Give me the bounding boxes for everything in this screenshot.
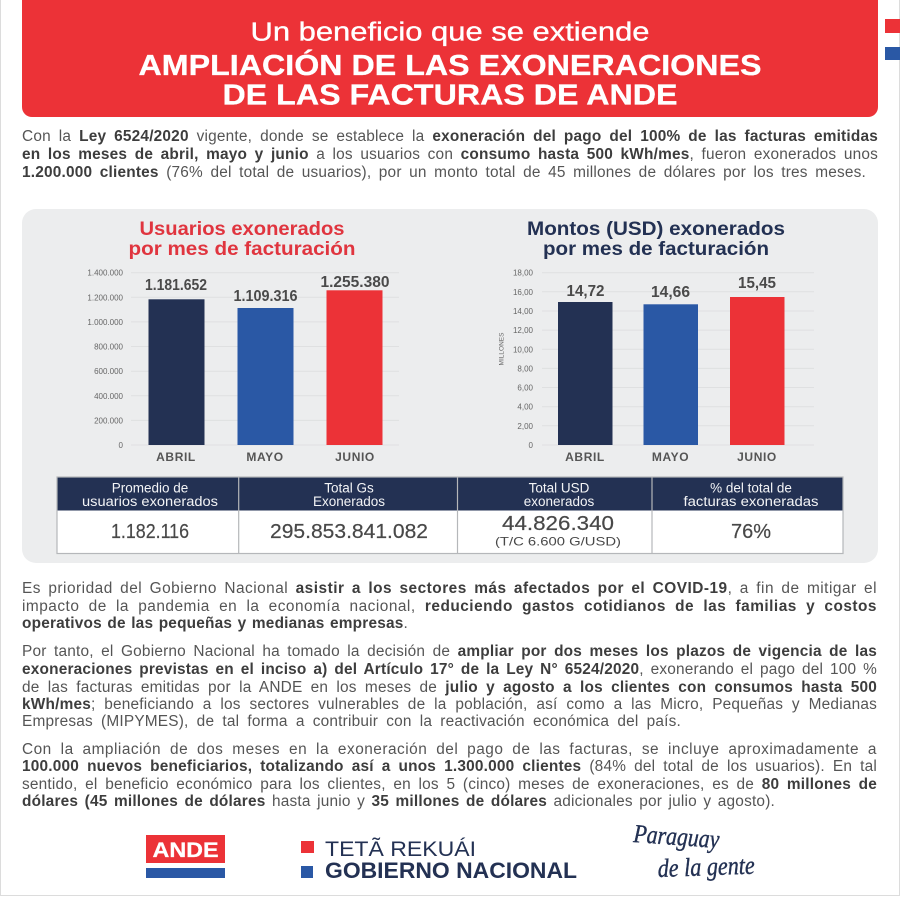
paragraph: prioridad: Es prioridad del Gobierno Nacional asistir a los sectores más afectados por el COVID-19, a fin de mitigar el (22, 580, 877, 597)
chart: montos USD exonerados (498, 219, 814, 464)
logo: Paraguay de la gente: Paraguay (632, 820, 721, 854)
chart: usuarios exonerados: 400.000 (94, 392, 124, 401)
chart: montos USD exonerados: ABRIL (565, 450, 605, 464)
paragraph: prioridad: impacto de la pandemia en la economía nacional, reduciendo gastos cotidianos de las familias y costos (22, 598, 877, 615)
chart: usuarios exonerados: 1.200.000 (87, 293, 124, 302)
header title: Un beneficio que se extiende (250, 18, 650, 46)
summary table: (T/C 6.600 G/USD) (495, 534, 621, 548)
chart: montos USD exonerados: 18,00 (513, 269, 534, 278)
header banner (22, 0, 878, 117)
paragraph: ampliación: exoneraciones previstas en el inciso a) del Artículo 17° de la Ley N° 6524/2020, exonerando el pago del 100 % (22, 661, 877, 678)
header title (138, 18, 762, 112)
header title: AMPLIACIÓN DE LAS EXONERACIONES (138, 48, 762, 82)
paragraph: beneficiarios: 100.000 nuevos beneficiarios, totalizando así a unos 1.300.000 clientes (84% del total de los usuarios). En tal (22, 758, 877, 775)
intro paragraph: 1.200.000 clientes (76% del total de usuarios), por un monto total de 45 millones de dólares por los tres meses. (22, 164, 866, 181)
intro paragraph: Con la Ley 6524/2020 vigente, donde se establece la exoneración del pago del 100% de las facturas emitidas (22, 128, 878, 145)
paragraph: beneficiarios: Con la ampliación de dos meses en la exoneración del pago de las facturas, se incluye aproximadamente a (22, 741, 877, 758)
chart: montos USD exonerados: MILLONES (498, 332, 506, 365)
chart: montos USD exonerados: 10,00 (513, 345, 534, 354)
chart: montos USD exonerados: por mes de facturación (543, 239, 769, 260)
chart: usuarios exonerados: 1.255.380 (320, 274, 390, 291)
paragraph: beneficiarios: dólares (45 millones de dólares hasta junio y 35 millones de dólares adicionales por julio y agosto). (22, 793, 775, 810)
summary table: % del total de (710, 480, 792, 496)
summary table: Promedio de (112, 480, 188, 496)
paragraph: ampliación: Por tanto, el Gobierno Nacional ha tomado la decisión de ampliar por dos meses los plazos de vigencia de las (22, 643, 877, 660)
chart: usuarios exonerados: 1.000.000 (87, 318, 124, 327)
chart: usuarios exonerados: por mes de facturación (128, 239, 356, 260)
summary table: exonerados (524, 494, 595, 509)
paragraph: prioridad: operativos de las pequeñas y medianas empresas. (22, 615, 408, 632)
chart: usuarios exonerados: ABRIL (156, 450, 196, 464)
summary table: Exonerados (313, 494, 385, 509)
logo: Tetã Rekuái Gobierno Nacional (301, 837, 577, 882)
logo: Paraguay de la gente (632, 820, 755, 883)
summary table: Total Gs (324, 480, 374, 496)
chart: usuarios exonerados: Usuarios exonerados (140, 219, 344, 240)
chart: montos USD exonerados: 14,00 (513, 307, 534, 316)
summary table: 76% (731, 521, 771, 543)
flag mark (885, 19, 900, 60)
chart: usuarios exonerados: MAYO (246, 450, 284, 464)
chart: usuarios exonerados: 1.109.316 (234, 288, 298, 305)
summary table: 44.826.340 (502, 513, 614, 535)
charts panel (22, 209, 878, 563)
paragraph: ampliación: de las facturas emitidas por la ANDE en los meses de julio y agosto a los clientes con consumos hasta 500 (22, 679, 877, 696)
summary table (56, 476, 844, 554)
chart: montos USD exonerados: 2,00 (517, 422, 534, 431)
chart: montos USD exonerados: JUNIO (737, 450, 777, 464)
chart: usuarios exonerados: JUNIO (335, 450, 375, 464)
paragraph: ampliación: kWh/mes; beneficiando a los sectores vulnerables de la población, así como a las Micro, Pequeñas y Medianas (22, 696, 877, 713)
chart: montos USD exonerados: 14,66 (651, 284, 690, 301)
chart: montos USD exonerados: 15,45 (738, 275, 776, 292)
chart: usuarios exonerados: 1.181.652 (145, 277, 207, 294)
chart: montos USD exonerados: 16,00 (513, 288, 534, 297)
summary table: 1.182.116 (111, 521, 189, 543)
chart: usuarios exonerados: 600.000 (94, 367, 124, 376)
chart: usuarios exonerados: 0 (119, 441, 124, 450)
chart: usuarios exonerados: 800.000 (94, 342, 124, 352)
chart: montos USD exonerados: 0 (529, 441, 534, 450)
paragraph: prioridad (22, 580, 877, 632)
chart: usuarios exonerados (87, 219, 399, 464)
logo: Tetã Rekuái Gobierno Nacional: TETÃ REKUÁI (325, 837, 476, 861)
chart: montos USD exonerados: 4,00 (517, 403, 534, 412)
chart: montos USD exonerados: 8,00 (517, 364, 534, 373)
chart: montos USD exonerados: 14,72 (566, 283, 604, 300)
chart: usuarios exonerados: 200.000 (94, 416, 124, 425)
summary table: Total USD (529, 480, 590, 496)
paragraph: beneficiarios: sentido, el beneficio económico para los clientes, en los 5 (cinco) meses de exoneraciones, es de 80 millones de (22, 776, 877, 793)
intro paragraph (22, 128, 878, 181)
paragraph: ampliación: Empresas (MIPYMES), de tal forma a contribuir con la reactivación económica del país. (22, 713, 681, 730)
summary table: usuarios exonerados (82, 494, 218, 509)
logo: ANDE (146, 835, 225, 878)
chart: usuarios exonerados: 1.400.000 (87, 269, 124, 278)
summary table: facturas exoneradas (684, 494, 819, 509)
chart: montos USD exonerados: MAYO (652, 450, 689, 464)
summary table: 295.853.841.082 (270, 521, 428, 543)
intro paragraph: en los meses de abril, mayo y junio a los usuarios con consumo hasta 500 kWh/mes, fueron exonerados unos (22, 146, 878, 163)
logo wordmark: ANDE: ANDE (152, 838, 218, 862)
chart: montos USD exonerados: Montos (USD) exonerados (527, 219, 785, 240)
chart: montos USD exonerados: 6,00 (517, 384, 534, 392)
header title: DE LAS FACTURAS DE ANDE (222, 80, 678, 112)
chart: montos USD exonerados: 12,00 (513, 326, 534, 335)
